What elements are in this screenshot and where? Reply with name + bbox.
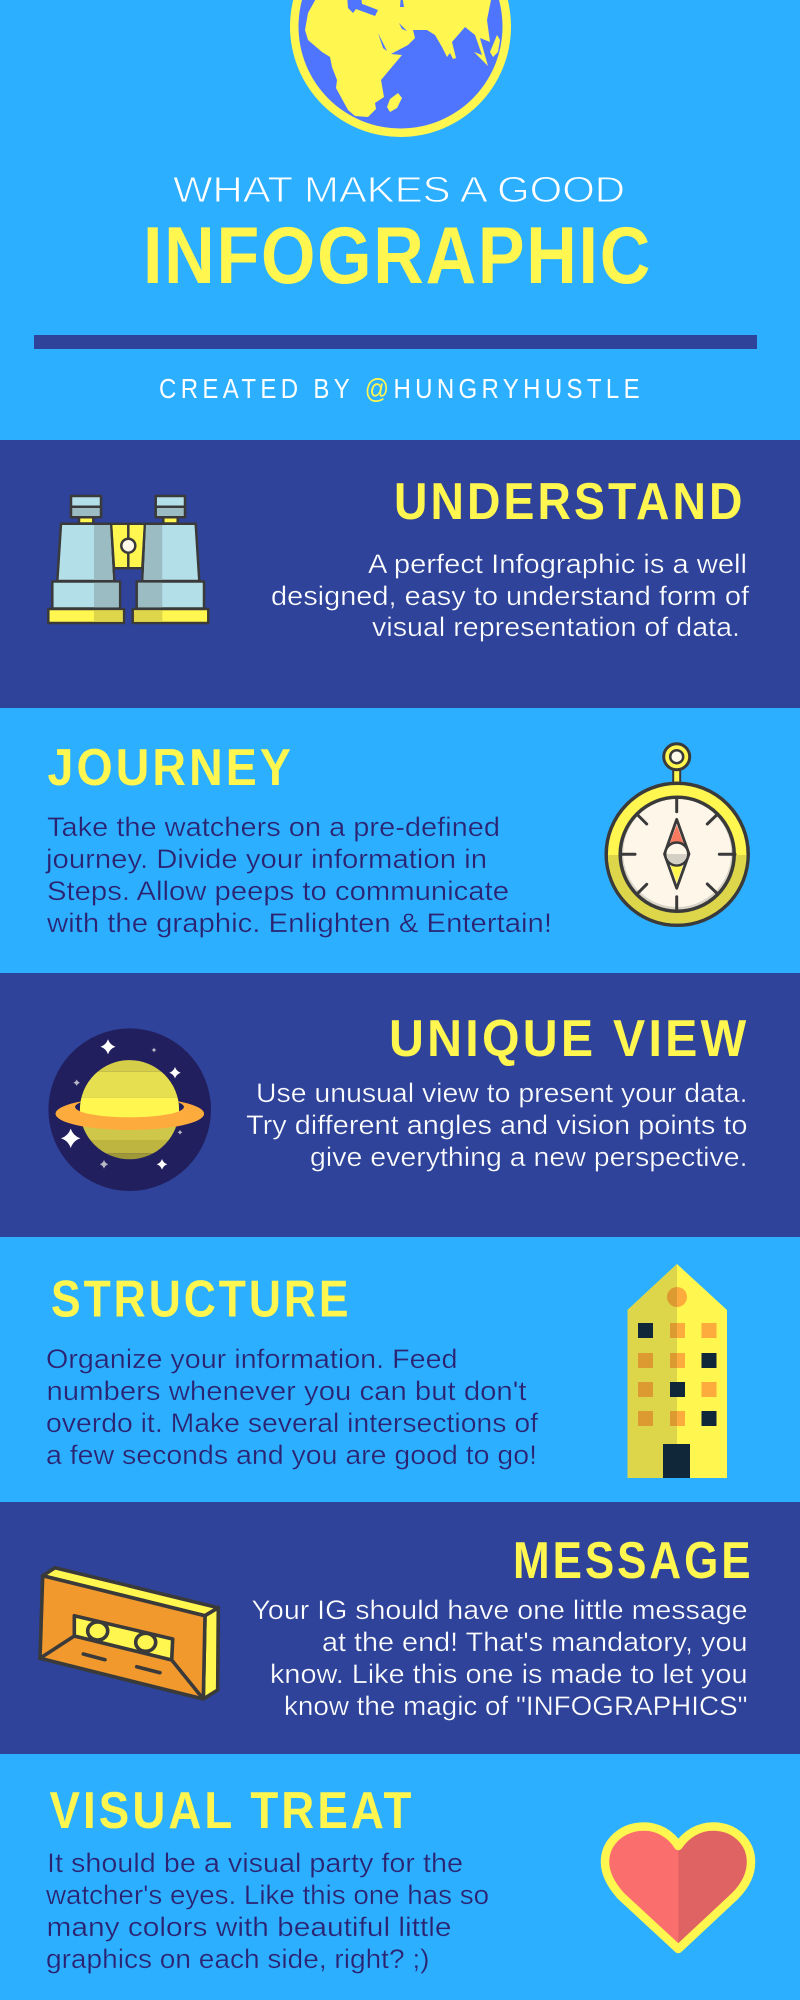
panel: structure (0, 1237, 800, 1502)
heading: structure: STRUCTURE (51, 1270, 352, 1328)
body text: journey: Take the watchers on a pre-defined (47, 812, 500, 842)
panel: message (0, 1502, 800, 1754)
body text: visual treat (45, 1848, 489, 1974)
panel: understand (0, 440, 800, 708)
heading: understand: UNDERSTAND (394, 473, 746, 531)
body text: understand: designed, easy to understand form of (271, 581, 750, 611)
icon: binoculars (48, 496, 208, 623)
body text: structure: a few seconds and you are good to go! (46, 1440, 537, 1470)
body text: understand: visual representation of data. (372, 612, 740, 642)
heading: visual treat: VISUAL TREAT (50, 1782, 414, 1840)
body text: structure (46, 1344, 539, 1470)
body text: visual treat: watcher's eyes. Like this one has so (45, 1880, 489, 1910)
icon: ringed planet (48, 1028, 211, 1191)
body text: unique view: Use unusual view to present your data. (256, 1078, 748, 1108)
panel: unique view (0, 973, 800, 1237)
body text: message: know. Like this one is made to let you (270, 1659, 748, 1689)
body text: structure: Organize your information. Feed (46, 1344, 457, 1374)
body text: visual treat: many colors with beautiful little (46, 1912, 451, 1942)
body text: understand: A perfect Infographic is a well (368, 549, 747, 579)
divider bar (34, 335, 757, 349)
body text: unique view: Try different angles and vision points to (246, 1110, 748, 1140)
icon: compass (606, 744, 748, 925)
title line: what makes a good: WHAT MAKES A GOOD (173, 169, 625, 210)
body text: understand (271, 549, 750, 642)
body text: visual treat: It should be a visual party for the (47, 1848, 463, 1878)
heading: message: MESSAGE (513, 1532, 754, 1590)
body text: structure: overdo it. Make several intersections of (46, 1408, 539, 1438)
panel: visual treat (46, 1792, 756, 1974)
body text: message: Your IG should have one little message (252, 1595, 748, 1625)
body text: unique view: give everything a new perspective. (310, 1142, 748, 1172)
heading: journey: JOURNEY (48, 739, 294, 797)
body text: journey: journey. Divide your information in (45, 844, 487, 874)
header panel (34, 0, 757, 404)
body text: message: at the end! That's mandatory, you (322, 1627, 748, 1657)
panel: journey (45, 742, 750, 938)
body text: journey (45, 812, 552, 938)
body text: message: know the magic of "INFOGRAPHICS" (284, 1691, 748, 1721)
body text: journey: Steps. Allow peeps to communicate (47, 876, 509, 906)
body text: visual treat: graphics on each side, right? ;) (46, 1944, 430, 1974)
body text: unique view (246, 1078, 748, 1172)
icon: cassette tape (40, 1568, 218, 1699)
icon: heart (605, 1826, 751, 1949)
icon: globe (290, 0, 511, 137)
body text: structure: numbers whenever you can but don't (46, 1376, 527, 1406)
heading: unique view: UNIQUE VIEW (389, 1010, 750, 1068)
icon: building (628, 1264, 727, 1478)
title: infographic: INFOGRAPHIC (143, 211, 652, 301)
body text: message (252, 1595, 748, 1721)
body text: journey: with the graphic. Enlighten & Entertain! (46, 908, 552, 938)
credit line: CREATED BY @HUNGRYHUSTLE (159, 373, 644, 404)
